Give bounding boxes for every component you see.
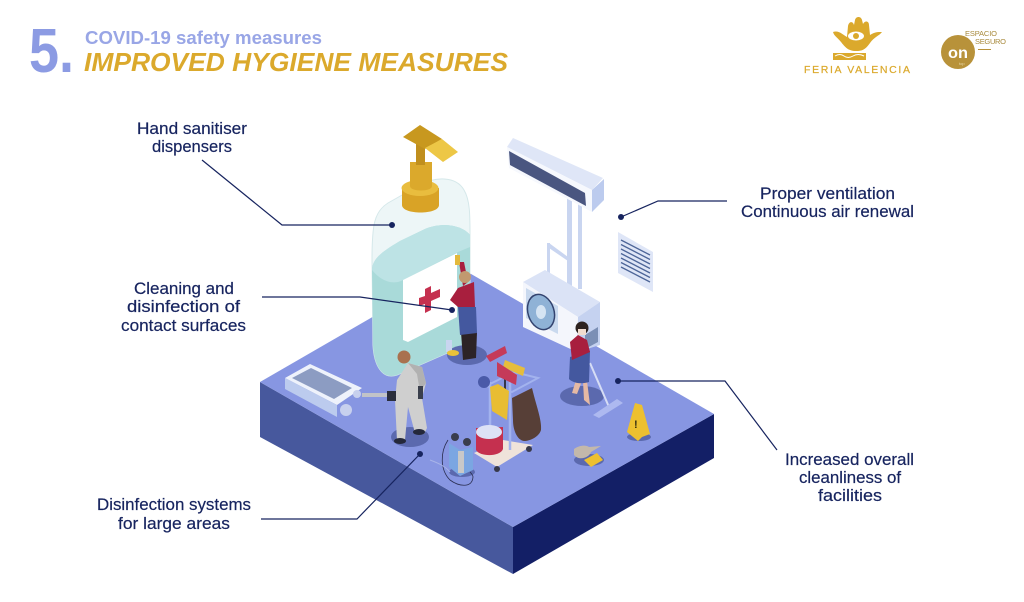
illustration: platform (260, 267, 714, 574)
illustration: worker disinfecting (362, 350, 429, 447)
illustration: disinfectant tank (430, 433, 475, 485)
logo: Espacio Seguro: SEGURO (975, 37, 1006, 46)
label: hand sanitiser: dispensers (152, 138, 232, 156)
bin bag (512, 388, 541, 441)
label: ventilation: Proper ventilation (760, 185, 895, 203)
bottle label (403, 253, 457, 342)
illustration: mopping worker (560, 322, 623, 418)
label: contact surfaces (121, 280, 455, 335)
illustration: sanitiser bottle (372, 125, 470, 376)
pump (402, 188, 439, 212)
illustration: cleaning cart (474, 346, 541, 472)
label: contact surfaces: contact surfaces (121, 317, 246, 335)
logo: Espacio Seguro: ESPACIO (965, 29, 997, 38)
illustration: worker cleaning bottle (446, 255, 487, 365)
outdoor unit (523, 270, 600, 317)
label text: Hand sanitiser (137, 120, 248, 138)
platform top (260, 267, 714, 527)
illustration: wall vent (618, 232, 653, 292)
logo: Feria Valencia: FERIA VALENCIA (804, 64, 910, 76)
label: overall cleanliness: Increased overall (785, 451, 914, 469)
red cross (419, 286, 440, 313)
label: contact surfaces: disinfection of (127, 298, 240, 316)
platform left side (260, 382, 513, 574)
label: ventilation (618, 185, 914, 221)
label: large areas: for large areas (118, 515, 230, 533)
label: overall cleanliness: cleanliness of (799, 469, 901, 487)
label: hand sanitiser (137, 120, 395, 228)
illustration: floor grille (285, 364, 362, 417)
label: large areas (97, 451, 423, 533)
main heading: IMPROVED HYGIENE MEASURES (84, 47, 509, 77)
label: overall cleanliness: facilities (818, 487, 882, 505)
logo: Feria Valencia (804, 17, 910, 76)
leader line (202, 160, 392, 225)
illustration: wet floor sign: ! (634, 419, 638, 431)
label: ventilation: Continuous air renewal (741, 203, 914, 221)
section number: 5. (29, 17, 74, 86)
logo: Espacio Seguro: top (959, 61, 965, 66)
platform right side (513, 414, 714, 574)
bucket (476, 427, 503, 455)
illustration: air conditioner (507, 138, 604, 352)
logo: Espacio Seguro: on (948, 45, 968, 62)
illustration: wet floor sign (627, 403, 651, 441)
indoor unit (507, 138, 603, 190)
label: large areas: Disinfection systems (97, 496, 251, 514)
label: contact surfaces: Cleaning and (134, 280, 234, 298)
yellow cloth (490, 384, 509, 420)
label: overall cleanliness (615, 378, 914, 505)
brushes (486, 346, 507, 362)
support poles (547, 198, 582, 289)
title block (84, 28, 509, 77)
subtitle: COVID-19 safety measures (85, 28, 322, 48)
illustration: dustpan and sponge (574, 446, 604, 467)
logo: Espacio Seguro (941, 29, 1006, 69)
